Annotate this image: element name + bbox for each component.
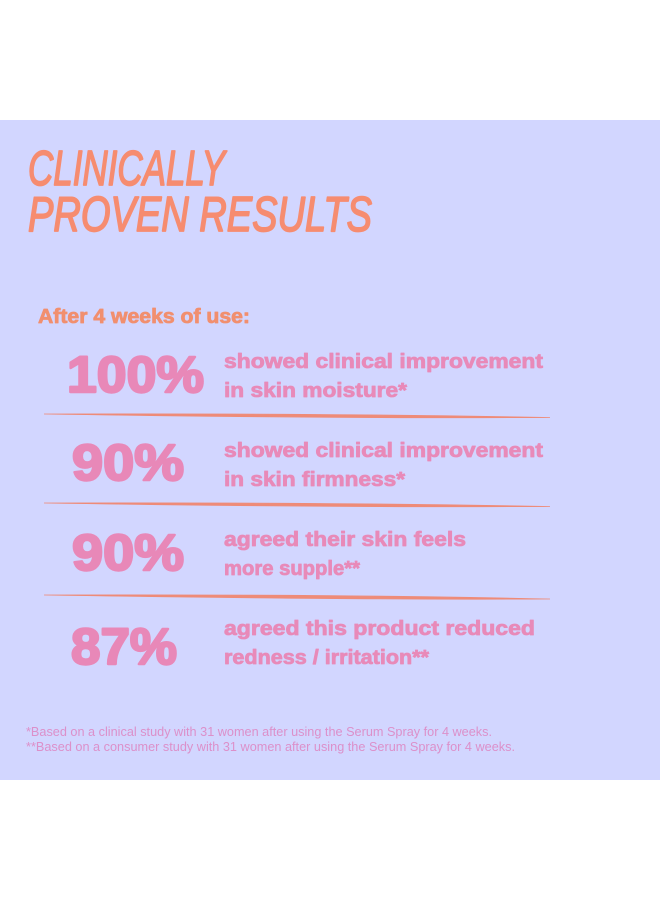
stat row: 100% skin moisture: in skin moisture*	[224, 379, 407, 402]
footnotes: **Based on a consumer study with 31 women after using the Serum Spray for 4 weeks.	[26, 740, 515, 754]
footnotes	[26, 725, 515, 754]
title: CLINICALLY	[28, 142, 227, 196]
panel: lavender background	[0, 120, 660, 780]
stat row: 87% redness: 87%	[71, 618, 177, 675]
stat row: 90% skin firmness: in skin firmness*	[224, 468, 405, 491]
stat row: 90% more supple: agreed their skin feels	[224, 528, 466, 551]
divider line 1	[44, 414, 550, 418]
stat row: 100% skin moisture: 100%	[67, 346, 204, 403]
stat row: 90% more supple: 90%	[72, 524, 184, 581]
stat row: 87% redness: agreed this product reduced	[224, 617, 535, 640]
divider line 3	[44, 595, 550, 599]
stat row: 90% skin firmness: showed clinical improvement	[224, 439, 543, 462]
footnotes: *Based on a clinical study with 31 women after using the Serum Spray for 4 weeks.	[26, 725, 492, 739]
title: PROVEN RESULTS	[28, 188, 372, 242]
stat row: 90% more supple	[72, 524, 466, 581]
stat row: 90% skin firmness: 90%	[72, 434, 184, 491]
stat row: 90% more supple: more supple**	[224, 557, 360, 580]
stat row: 100% skin moisture: showed clinical improvement	[224, 350, 543, 373]
stat row: 100% skin moisture	[67, 346, 543, 403]
title	[28, 142, 372, 242]
subheading: After 4 weeks of use:	[38, 305, 250, 328]
stat row: 87% redness	[71, 617, 535, 675]
stat row: 87% redness: redness / irritation**	[224, 646, 429, 669]
stat row: 90% skin firmness	[72, 434, 543, 491]
divider line 2	[44, 503, 550, 507]
